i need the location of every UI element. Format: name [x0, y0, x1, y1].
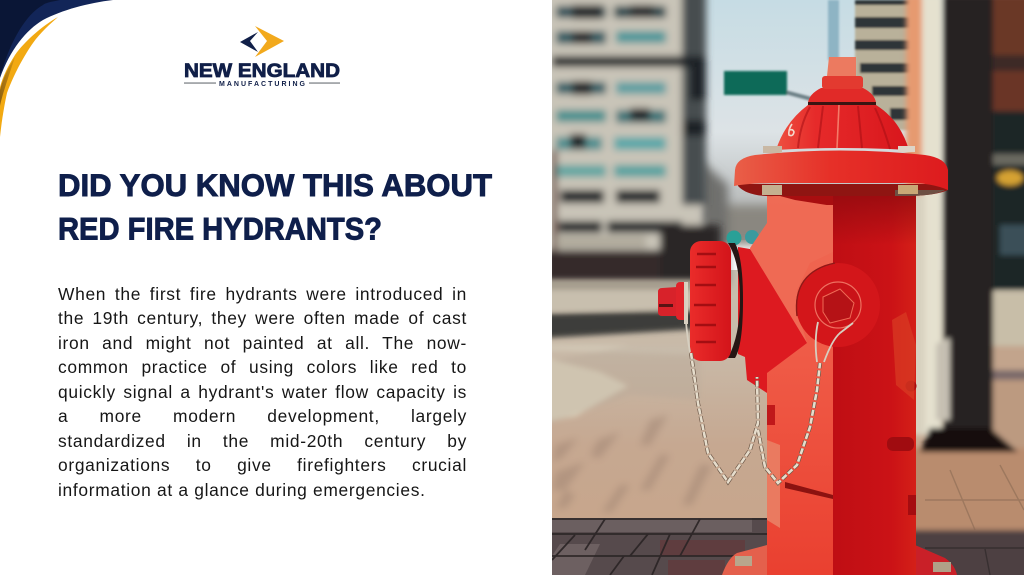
pillar and right-hand dark background — [902, 0, 1024, 575]
body text: iron and might not painted at all. The now- — [58, 332, 467, 352]
logo chevrons — [240, 26, 284, 57]
outlet gasket — [728, 243, 743, 358]
body text: standardized in the mid-20th century by — [58, 430, 467, 450]
security chain — [691, 353, 820, 483]
outlet coupling ring — [690, 241, 731, 361]
coral shoulder above nozzle — [750, 205, 833, 342]
teal bokeh lights — [726, 230, 759, 246]
navy swoosh — [0, 0, 113, 78]
body text: common practice of using colors like red to — [58, 357, 467, 377]
heading: RED FIRE HYDRANTS? — [58, 210, 382, 246]
hydrant top collar — [808, 76, 876, 105]
body text: the 19th century, they were often made of cast — [58, 308, 467, 328]
background ground shadow and light patch — [552, 276, 690, 422]
street sign — [724, 71, 815, 100]
side outlet nozzle neck — [738, 247, 807, 393]
top right building — [828, 0, 912, 130]
brick paving — [552, 415, 767, 575]
blurred building on left — [545, 0, 720, 282]
logo: New England Manufacturing — [184, 26, 340, 88]
right brick lines — [925, 465, 1024, 575]
outlet small cap — [658, 282, 688, 324]
distant grey building and tree — [698, 160, 767, 286]
hydrant barrel — [767, 190, 916, 575]
body text: organizations to give firefighters crucial — [58, 455, 467, 475]
logo wordmark: NEW ENGLAND — [184, 61, 340, 82]
corner swoosh decoration — [0, 0, 113, 137]
photo: red fire hydrant on a city street — [552, 0, 1024, 575]
logo tagline: MANUFACTURING — [219, 81, 306, 88]
chain hook wires — [685, 283, 853, 362]
street background — [552, 0, 1024, 575]
gold swoosh — [0, 17, 58, 137]
windows — [556, 6, 666, 177]
hydrant dome — [763, 105, 915, 153]
hydrant bonnet flange — [734, 150, 948, 196]
hydrant operating nut — [827, 57, 856, 76]
bolt boss — [796, 263, 880, 347]
heading — [58, 168, 492, 246]
body text: quickly signal a hydrant's water flow capacity is — [58, 382, 467, 402]
hydrant base flange — [722, 545, 767, 575]
body text: When the first fire hydrants were introduced in — [58, 284, 467, 304]
body text — [58, 284, 467, 500]
body text: a more modern development, largely — [58, 406, 467, 426]
hydrant — [658, 57, 957, 575]
body text: information at a glance during emergencies. — [58, 480, 426, 500]
